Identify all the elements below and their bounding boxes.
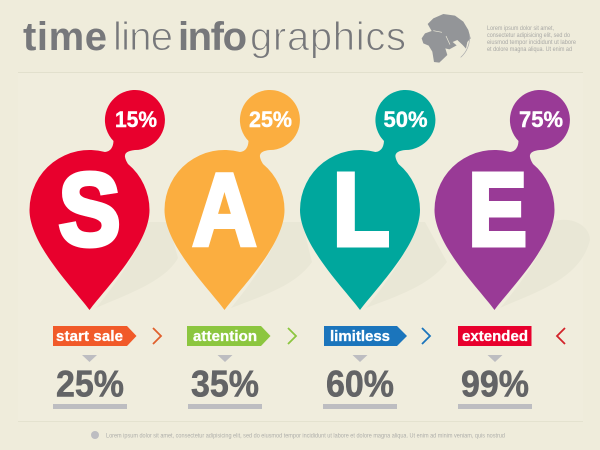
title <box>23 15 406 59</box>
icon: globe <box>422 14 471 63</box>
arrow chevron <box>153 328 161 344</box>
column: limitless <box>323 326 430 409</box>
label tag <box>458 326 532 346</box>
badge value: 75% <box>519 107 563 132</box>
arrow chevron <box>557 328 565 344</box>
bar <box>458 404 532 409</box>
header text block <box>487 25 577 53</box>
pin: L <box>300 90 435 310</box>
badge value: 25% <box>249 107 292 132</box>
letter A: A <box>192 153 257 267</box>
label text: limitless <box>330 328 390 345</box>
footer dot <box>91 431 99 439</box>
arrow chevron <box>422 328 430 344</box>
column: start sale <box>53 326 161 409</box>
title: info <box>178 15 247 59</box>
letter S: S <box>59 151 120 267</box>
label tag <box>187 326 270 346</box>
title: line <box>113 15 173 59</box>
bar <box>188 404 262 409</box>
title: time <box>23 15 107 59</box>
pointer <box>488 355 502 362</box>
pin shape orange <box>164 90 300 310</box>
pin: E <box>434 90 570 310</box>
pointer <box>352 355 368 362</box>
bar <box>323 404 397 409</box>
pin shape teal <box>300 90 435 310</box>
value: 35% <box>191 364 259 404</box>
column: attention <box>187 326 296 409</box>
footer text: Lorem ipsum dolor sit amet, consectetur adipisicing elit, sed do eiusmod tempor incididunt ut labore et dolore magna aliqua. Ut enim ad minim veniam, quis nostrud <box>106 432 505 440</box>
header text block: et dolore magna aliqua. Ut enim ad <box>487 46 572 53</box>
title: graphics <box>250 15 406 59</box>
pin shape red <box>29 90 165 310</box>
bar <box>53 404 127 409</box>
pointer <box>218 355 232 362</box>
pin shadows <box>96 220 590 308</box>
label text: attention <box>193 328 257 345</box>
header text block: Lorem ipsum dolor sit amet, <box>487 25 554 32</box>
label text: extended <box>462 328 528 345</box>
column: extended <box>458 326 565 409</box>
pointer <box>82 355 97 362</box>
letter E: E <box>468 152 527 267</box>
label text: start sale <box>56 328 123 345</box>
value: 60% <box>326 364 394 404</box>
label tag <box>324 326 407 346</box>
value: 99% <box>461 364 529 404</box>
letter L: L <box>333 152 390 267</box>
header text block: consectetur adipisicing elit, sed do <box>487 32 570 39</box>
badge value: 15% <box>115 107 157 132</box>
badge value: 50% <box>384 107 428 132</box>
arrow chevron <box>288 328 296 344</box>
pin: A <box>164 90 300 310</box>
label tag <box>53 326 136 346</box>
pin shape purple <box>434 90 570 310</box>
value: 25% <box>56 364 124 404</box>
pin: S <box>29 90 165 310</box>
header text block: eiusmod tempor incididunt ut labore <box>487 39 577 46</box>
